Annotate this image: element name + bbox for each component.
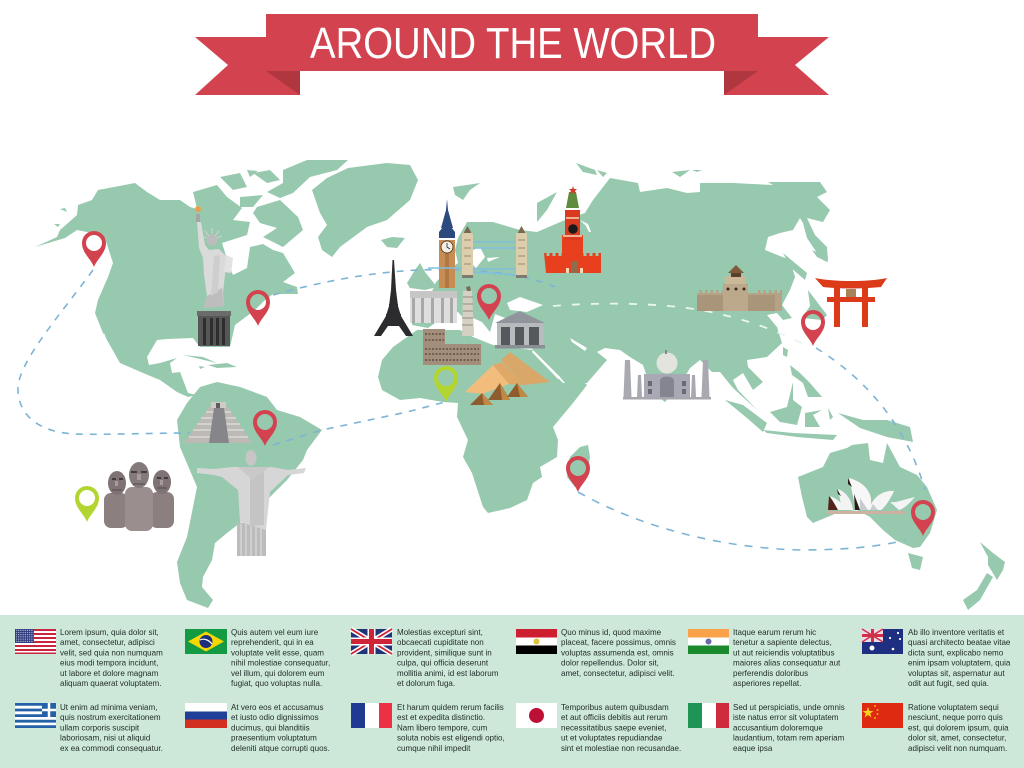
flag: France <box>351 703 392 728</box>
text: Greece: quis nostrum exercitationem <box>60 712 161 722</box>
route: Madagascar to Australia <box>578 492 905 550</box>
pin: Easter Island <box>75 486 99 522</box>
text: China: dolor sit, amet, consectetur, <box>908 732 1006 743</box>
text: China: adipisci velit non numquam. <box>908 742 1007 753</box>
text: Australia: odit aut fugit, sed quia. <box>908 678 989 688</box>
pin: Madagascar <box>566 456 590 492</box>
Arctic islands <box>220 160 348 207</box>
text: Brazil: Quis autem vel eum iure <box>231 627 318 637</box>
text: China: est, qui dolorem ipsum, quia <box>908 722 1009 732</box>
Greenland <box>312 163 418 257</box>
text: Japan: Temporibus autem quibusdam <box>561 702 669 712</box>
text: Japan: necessitatibus saepe eveniet, <box>561 722 667 732</box>
text: USA: Lorem ipsum, quia dolor sit, <box>60 627 159 637</box>
text: USA: aliquam quaerat voluptatem. <box>60 678 161 688</box>
landmark: Chichen Itza pyramid <box>184 402 252 443</box>
pin: Alaska <box>82 231 106 267</box>
flag: Brazil <box>185 629 227 654</box>
text: Egypt: dolor repellendus. Dolor sit, <box>561 657 659 668</box>
flag: United Kingdom <box>351 629 392 654</box>
pin: USA <box>246 290 270 326</box>
flag: Greece <box>15 703 56 728</box>
text: Italy: laudantium, totam rem aperiam <box>733 732 844 743</box>
landmark: Eiffel Tower <box>374 260 413 336</box>
country info panel <box>0 615 1024 768</box>
text: United Kingdom: obcaecati cupiditate non <box>397 637 484 647</box>
route: Japan to Australia <box>816 348 925 490</box>
text: Italy: eaque ipsa <box>733 742 773 753</box>
landmark: Egyptian pyramids <box>465 352 550 405</box>
text: USA: velit, sed quia non numquam <box>60 647 163 657</box>
Madagascar <box>567 445 590 487</box>
Alaska islands <box>54 208 67 227</box>
Eurasia <box>412 178 830 410</box>
text: Japan: et aut officiis debitis aut rerum <box>561 712 668 722</box>
text: France: soluta nobis est eligendi optio, <box>397 732 505 743</box>
landmark: Great Wall of China <box>697 265 782 311</box>
flag: Russia <box>185 703 227 728</box>
text: Australia: Ab illo inventore veritatis et <box>908 627 1005 637</box>
text: United Kingdom: et dolorum fuga. <box>397 678 455 688</box>
flag: Australia <box>862 629 903 654</box>
New Zealand <box>963 542 1005 610</box>
text: Italy: Sed ut perspiciatis, unde omnis <box>733 702 845 712</box>
text: Brazil: vel illum, qui dolorem eum <box>231 667 324 678</box>
text: United Kingdom: culpa, qui officia deserunt <box>397 657 489 668</box>
title: AROUND THE WORLD <box>310 19 716 68</box>
title banner <box>195 14 829 95</box>
landmark: Tower Bridge <box>428 226 527 278</box>
landmark: Torii gate <box>815 278 887 327</box>
text: United Kingdom: mollitia animi, id est laborum <box>397 667 498 678</box>
text: India: perferendis doloribus <box>733 667 808 678</box>
text: Brazil: fugiat, quo voluptas nulla. <box>231 678 322 688</box>
text: China: Ratione voluptatem sequi <box>908 702 999 712</box>
text: USA: amet, consectetur, adipisci <box>60 637 155 647</box>
text: Egypt: placeat, facere possimus, omnis <box>561 637 676 647</box>
text: Australia: dicta sunt, explicabo nemo <box>908 647 1004 657</box>
text: United Kingdom: Molestias excepturi sint, <box>397 627 483 637</box>
pin: Brazil <box>253 410 277 446</box>
text: France: est et expedita distinctio. <box>397 712 485 722</box>
flag: Italy <box>688 703 729 728</box>
inland seas <box>103 220 591 379</box>
text: Greece: Ut enim ad minima veniam, <box>60 702 157 712</box>
text: France: cumque nihil impedit <box>397 742 471 753</box>
landmark: Kremlin Spasskaya Tower <box>544 186 601 273</box>
text: Italy: iste natus error sit voluptatem <box>733 712 839 722</box>
pin: Australia <box>911 500 935 536</box>
Taiwan <box>783 347 788 357</box>
text: USA: eius modi tempora incidunt, <box>60 657 158 668</box>
text: Greece: ex ea commodi consequatur. <box>60 742 163 753</box>
text: Brazil: nihil molestiae consequatur, <box>231 657 330 668</box>
text: Brazil: voluptate velit esse, quam <box>231 647 324 657</box>
text: India: maiores alias consequatur aut <box>733 657 841 668</box>
flag: China <box>862 703 903 728</box>
Southeast Asia islands <box>725 365 913 442</box>
route: Europe to Japan <box>553 304 805 345</box>
text: India: asperiores repellat. <box>733 678 801 688</box>
text: India: Itaque earum rerum hic <box>733 627 816 637</box>
landmark: Big Ben <box>439 199 455 288</box>
text: Russia: At vero eos et accusamus <box>231 702 324 712</box>
Svalbard and arctic Russia islands <box>453 163 702 222</box>
text: Australia: quasi architecto beatae vitae <box>908 637 1011 647</box>
text: France: Nam libero tempore, cum <box>397 722 487 732</box>
flag: India <box>688 629 729 654</box>
text: Egypt: Quo minus id, quod maxime <box>561 627 661 637</box>
text: Russia: et iusto odio dignissimos <box>231 712 319 722</box>
text: Egypt: amet, consectetur, adipisci velit. <box>561 667 675 678</box>
Iceland <box>381 237 405 248</box>
text: Japan: ut et voluptates repudiandae <box>561 732 663 743</box>
pin: Japan <box>801 310 825 346</box>
route: USA to Moscow <box>273 270 555 295</box>
North America <box>35 183 298 397</box>
text: Brazil: reprehenderit, qui in ea <box>231 637 314 647</box>
text: Egypt: voluptas assumenda est, omnis <box>561 647 674 657</box>
text: Japan: sint et molestiae non recusandae. <box>561 742 681 753</box>
Caribbean islands <box>183 355 237 369</box>
landmark: Colosseum <box>423 329 481 365</box>
text: India: tenetur a sapiente delectus, <box>733 637 832 647</box>
pin: Greece <box>477 284 501 320</box>
South America <box>177 382 322 608</box>
landmark: Statue of Liberty <box>195 206 233 346</box>
text: United Kingdom: provident, similique sunt in <box>397 647 492 657</box>
landmark: Moai statues <box>104 462 174 531</box>
landmark: Brandenburg Gate <box>410 291 457 323</box>
route: Brazil to Africa <box>273 402 445 445</box>
Australia <box>798 443 937 548</box>
landmark: Sydney Opera House <box>827 478 915 514</box>
United Kingdom <box>407 263 437 290</box>
world map <box>35 160 1005 610</box>
landmark: Christ the Redeemer <box>197 450 306 556</box>
flag: USA <box>15 629 56 654</box>
Japan and Sakhalin <box>783 250 828 320</box>
landmark: Leaning Tower of Pisa <box>462 286 474 336</box>
Tasmania <box>908 553 923 570</box>
Africa <box>378 330 587 513</box>
text: USA: ut labore et dolore magnam <box>60 667 158 678</box>
flag: Egypt <box>516 629 557 654</box>
text: Australia: voluptas sit, aspernatur aut <box>908 667 1005 678</box>
landmark: Greek temple <box>495 311 545 348</box>
text: Australia: enim ipsam voluptatem, quia <box>908 657 1011 668</box>
landmark: Taj Mahal <box>623 350 711 400</box>
pin: West Africa <box>434 366 458 402</box>
text: Russia: praesentium voluptatum <box>231 732 317 743</box>
text: Greece: laboriosam, nisi ut aliquid <box>60 732 151 743</box>
text: India: ut aut reiciendis voluptatibus <box>733 647 834 657</box>
text: Greece: ullam corporis suscipit <box>60 722 140 732</box>
flag: Japan <box>516 703 557 728</box>
text: France: Et harum quidem rerum facilis <box>397 702 504 712</box>
text: Russia: deleniti atque corrupti quos. <box>231 742 330 753</box>
route: Alaska to South America <box>18 270 190 434</box>
text: China: nesciunt, neque porro quis <box>908 712 1003 722</box>
text: Russia: ducimus, qui blanditiis <box>231 722 310 732</box>
text: Italy: accusantium doloremque <box>733 722 823 732</box>
Baffin Island <box>253 200 303 247</box>
